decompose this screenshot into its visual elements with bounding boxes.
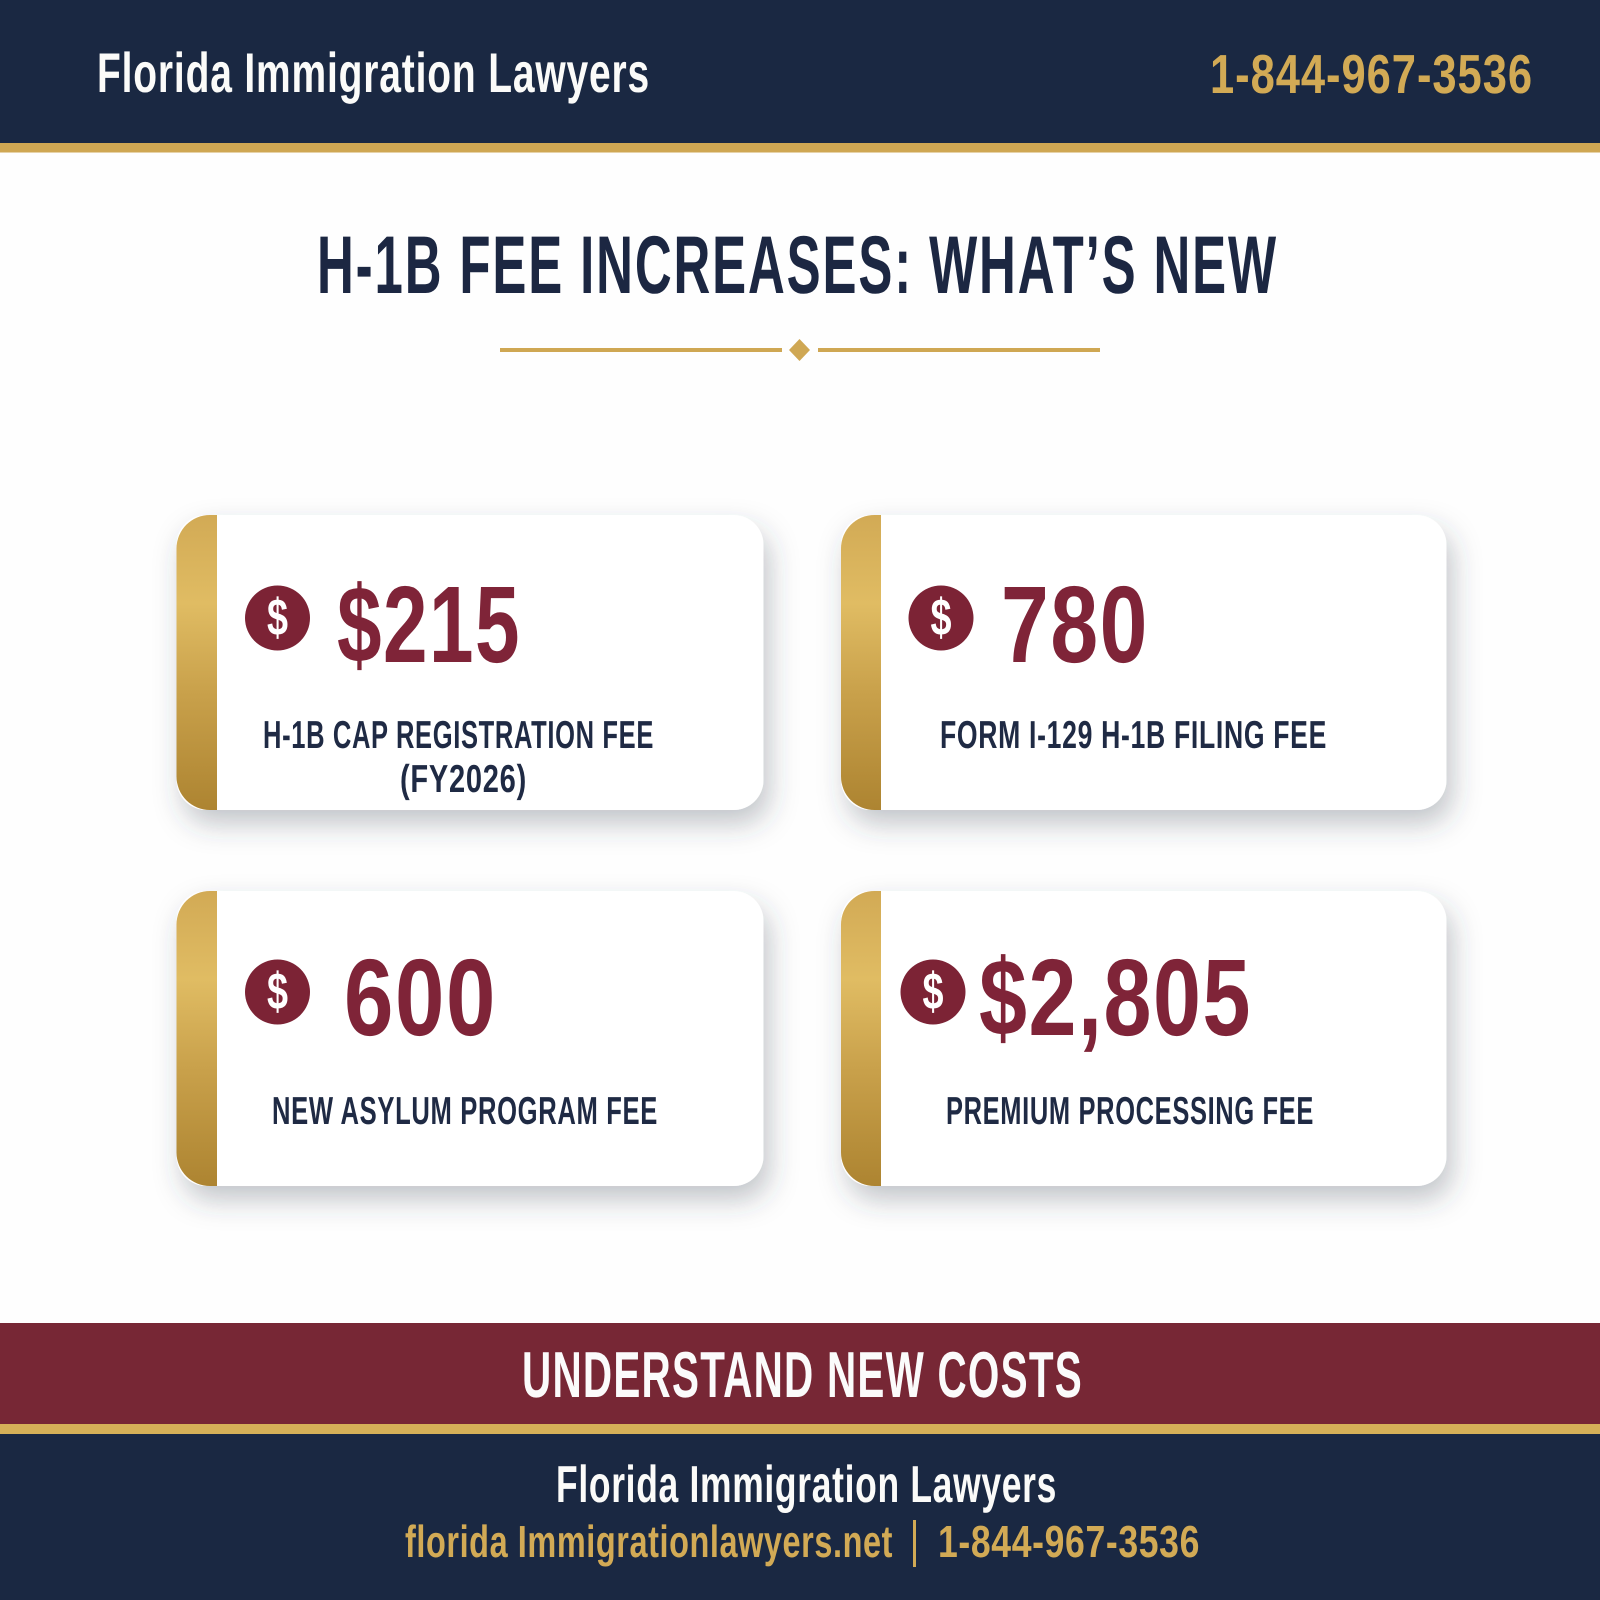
header firm name: Florida Immigration Lawyers: [97, 41, 650, 104]
fee label: PREMIUM PROCESSING FEE: [946, 1090, 1314, 1133]
panel: H-1B cap registration fee: [176, 515, 764, 810]
footer separator: [913, 1520, 916, 1567]
panel: new asylum program fee: [176, 891, 764, 1186]
call-to-action banner: [0, 1323, 1600, 1424]
banner text: UNDERSTAND NEW COSTS: [522, 1338, 1083, 1411]
title divider with diamond: [500, 339, 1100, 361]
icon: dollar coin: $: [922, 963, 944, 1021]
icon: dollar coin: [900, 960, 966, 1024]
fee label: [263, 714, 654, 801]
footer phone number: 1-844-967-3536: [938, 1516, 1200, 1567]
icon: dollar coin: [908, 586, 974, 650]
fee amount: 600: [344, 937, 497, 1059]
icon: dollar coin: $: [930, 589, 952, 647]
panel: premium processing fee: [841, 891, 1446, 1186]
icon: dollar coin: [245, 586, 310, 650]
icon: dollar coin: $: [267, 963, 288, 1021]
icon: dollar coin: $: [267, 589, 288, 647]
fee amount: $2,805: [979, 937, 1252, 1059]
fee label: (FY2026): [400, 758, 527, 801]
fee label: NEW ASYLUM PROGRAM FEE: [272, 1090, 658, 1133]
fee amount: $215: [337, 564, 521, 686]
header bar: [0, 0, 1600, 152]
icon: dollar coin: [245, 960, 310, 1024]
fee amount: 780: [1001, 564, 1149, 686]
footer: [0, 1424, 1600, 1600]
panel: Form I-129 H-1B filing fee: [841, 515, 1446, 810]
fee label: FORM I-129 H-1B FILING FEE: [940, 714, 1327, 757]
footer website: florida Immigrationlawyers.net: [405, 1516, 893, 1567]
fee label: H-1B CAP REGISTRATION FEE: [263, 714, 654, 757]
footer firm name: Florida Immigration Lawyers: [556, 1456, 1057, 1514]
